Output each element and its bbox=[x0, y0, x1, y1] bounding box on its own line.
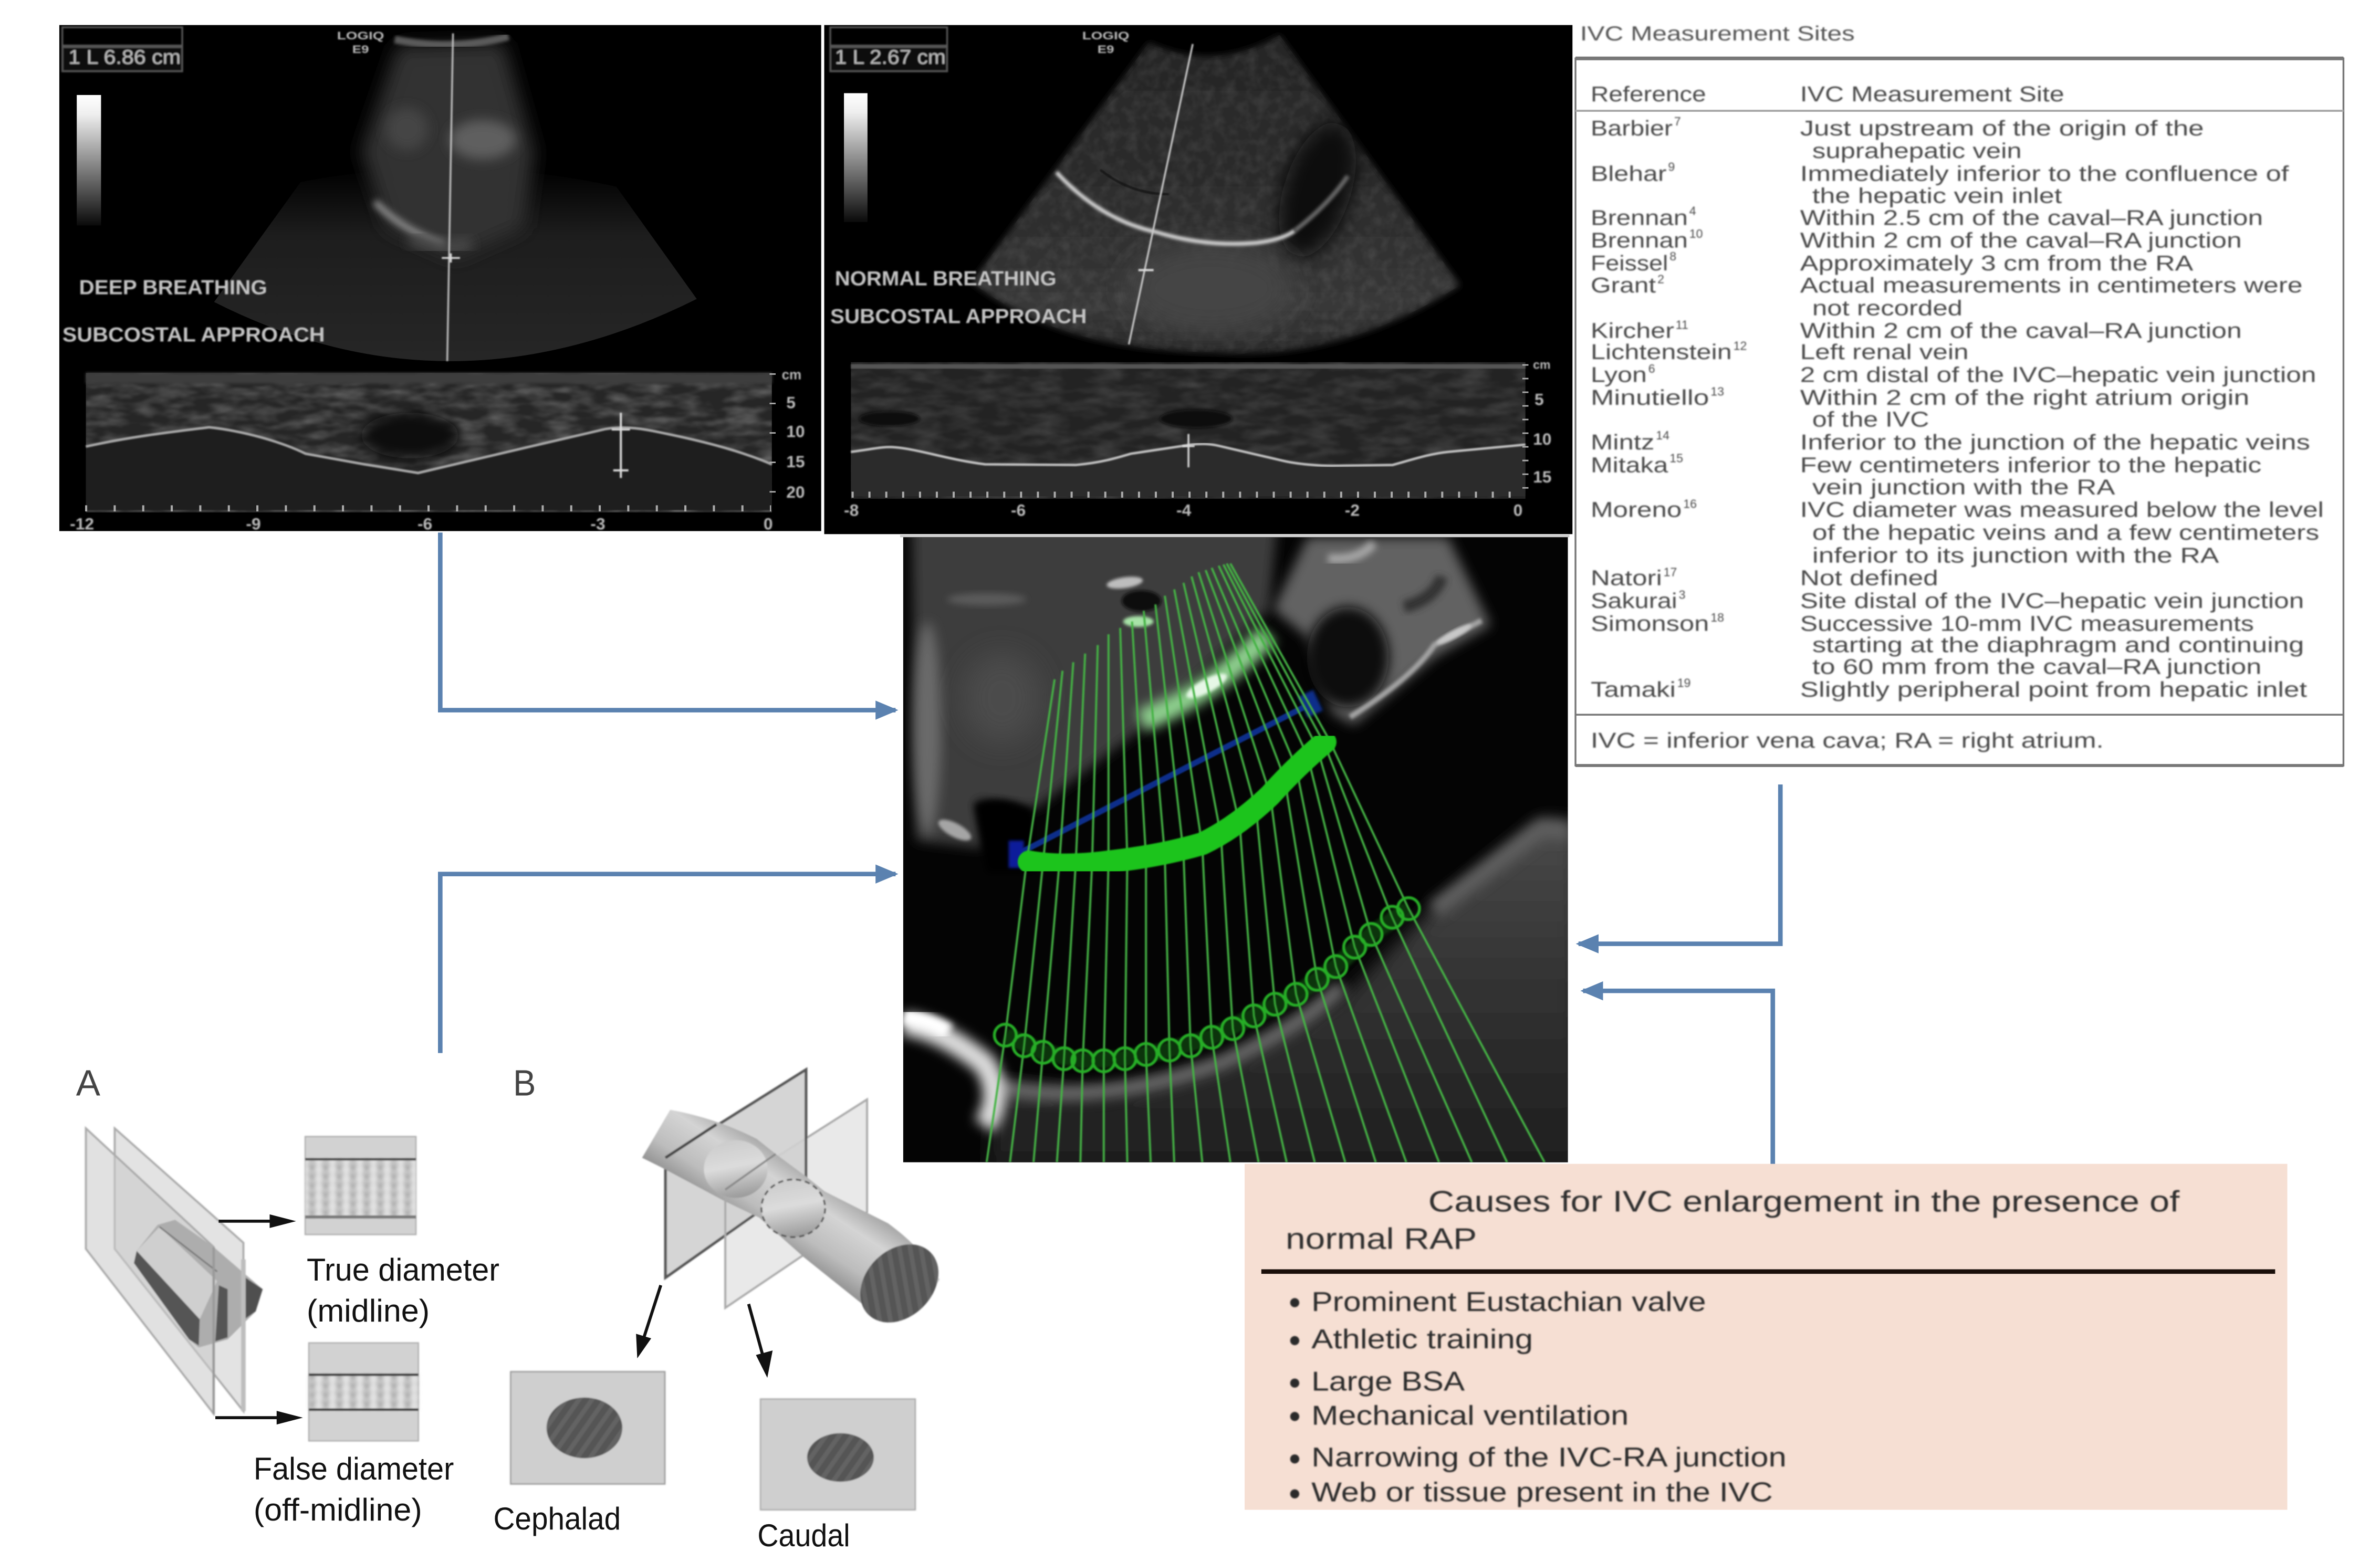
reference column: Mintz bbox=[1591, 430, 1654, 454]
blue diameter line bbox=[1009, 690, 1323, 868]
measurement site column: starting at the diaphragm and continuing bbox=[1812, 633, 2304, 657]
reference column: 14 bbox=[1656, 428, 1669, 442]
measurement site column: the hepatic vein inlet bbox=[1812, 183, 2062, 207]
causes list: Athletic training bbox=[1311, 1324, 1533, 1355]
ultrasound sector bbox=[214, 35, 696, 361]
reference column: Lyon bbox=[1591, 362, 1647, 386]
reference column: 4 bbox=[1689, 204, 1696, 218]
upper right tissue bbox=[1273, 537, 1490, 725]
breathing labels: NORMAL BREATHING bbox=[835, 267, 1057, 290]
measurement site column: 2 cm distal of the IVC–hepatic vein junction bbox=[1800, 362, 2316, 386]
reference column: 13 bbox=[1710, 384, 1724, 398]
diagram A labels: (off-midline) bbox=[254, 1492, 422, 1527]
measurement site column: Within 2 cm of the caval–RA junction bbox=[1800, 228, 2242, 253]
diagram B labels: Caudal bbox=[757, 1517, 850, 1553]
arrows to cross-sections bbox=[215, 1214, 303, 1424]
panel: central CT image with green measurement lines bbox=[900, 516, 1579, 1183]
reference column: Simonson bbox=[1591, 611, 1709, 635]
reference column: 6 bbox=[1648, 362, 1655, 375]
M-mode axis labels: 15 bbox=[786, 452, 805, 471]
causes heading: normal RAP bbox=[1286, 1222, 1477, 1255]
M-mode axis labels: 15 bbox=[1533, 467, 1552, 486]
measurement site column: Approximately 3 cm from the RA bbox=[1800, 251, 2193, 275]
measurement site column: Few centimeters inferior to the hepatic bbox=[1800, 453, 2261, 477]
M-mode axis labels: -12 bbox=[70, 515, 94, 533]
reference column: Barbier bbox=[1591, 116, 1673, 140]
M-mode axis labels: -8 bbox=[844, 501, 859, 520]
measurement site column: Slightly peripheral point from hepatic inlet bbox=[1800, 677, 2307, 701]
measurement site column: Just upstream of the origin of the bbox=[1800, 116, 2204, 140]
panel: deep breathing ultrasound bbox=[59, 25, 821, 533]
breathing labels: SUBCOSTAL APPROACH bbox=[830, 306, 1087, 328]
M-mode axis labels: 5 bbox=[1535, 390, 1544, 409]
reference column: 8 bbox=[1669, 249, 1676, 263]
measurement site column: Within 2.5 cm of the caval–RA junction bbox=[1800, 205, 2263, 229]
M-mode axis labels: -3 bbox=[590, 515, 606, 533]
reference column: Minutiello bbox=[1591, 385, 1709, 410]
causes list: Prominent Eustachian valve bbox=[1311, 1287, 1706, 1317]
measurement site column: Successive 10-mm IVC measurements bbox=[1800, 611, 2254, 635]
panel: diagram B cross-sectional planes bbox=[493, 1063, 954, 1553]
depth readout bbox=[62, 27, 384, 71]
tube with planes bbox=[642, 1070, 954, 1338]
causes list bbox=[1290, 1287, 1787, 1508]
causes heading: Causes for IVC enlargement in the presence of bbox=[1428, 1185, 2180, 1218]
M-mode axis labels: -4 bbox=[1176, 501, 1192, 520]
caudal section bbox=[760, 1399, 915, 1510]
ultrasound sector bbox=[972, 30, 1465, 364]
measurement site column: Not defined bbox=[1800, 566, 1938, 590]
M-mode axis labels bbox=[70, 367, 805, 533]
breathing labels: DEEP BREATHING bbox=[79, 277, 267, 299]
reference column: 19 bbox=[1677, 676, 1690, 689]
table header: Reference bbox=[1591, 82, 1706, 106]
reference column: Tamaki bbox=[1591, 677, 1676, 701]
table title: IVC Measurement Sites bbox=[1580, 23, 1855, 45]
reference column: 7 bbox=[1674, 114, 1681, 128]
reference column: Kircher bbox=[1591, 319, 1674, 343]
reference column bbox=[1591, 114, 1747, 701]
reference column: 18 bbox=[1710, 611, 1724, 624]
left upper tissue bbox=[912, 516, 1278, 848]
M-mode axis labels bbox=[844, 358, 1552, 520]
measurement site column: vein junction with the RA bbox=[1812, 475, 2115, 499]
grayscale bar bbox=[844, 93, 868, 222]
causes list: Web or tissue present in the IVC bbox=[1311, 1477, 1773, 1508]
M-mode strip bbox=[85, 373, 773, 513]
causes list: Narrowing of the IVC-RA junction bbox=[1311, 1442, 1787, 1473]
M-mode strip bbox=[851, 362, 1526, 499]
true diameter section bbox=[305, 1137, 416, 1234]
reference column: 17 bbox=[1664, 565, 1677, 579]
measurement site column: suprahepatic vein bbox=[1812, 139, 2022, 163]
measurement site column: Immediately inferior to the confluence of bbox=[1800, 161, 2289, 185]
measurement site column: Within 2 cm of the right atrium origin bbox=[1800, 385, 2249, 410]
measurement site column: Actual measurements in centimeters were bbox=[1800, 273, 2302, 297]
measurement line bbox=[1129, 44, 1193, 344]
reference column: Mitaka bbox=[1591, 453, 1668, 477]
depth readout: E9 bbox=[1098, 43, 1114, 56]
diagram A labels: (midline) bbox=[307, 1293, 430, 1328]
M-mode axis labels: 10 bbox=[786, 422, 805, 441]
arrows to sections bbox=[636, 1285, 773, 1378]
M-mode axis labels: -6 bbox=[417, 515, 432, 533]
diagram A labels: False diameter bbox=[254, 1451, 454, 1486]
reference column: Brennan bbox=[1591, 228, 1688, 253]
panel: normal breathing ultrasound bbox=[824, 25, 1572, 534]
reference column: 3 bbox=[1679, 588, 1685, 602]
panel letter A: A bbox=[76, 1063, 101, 1104]
measurement site column: Site distal of the IVC–hepatic vein junction bbox=[1800, 589, 2304, 613]
measurement site column: not recorded bbox=[1812, 296, 1963, 320]
table frame bbox=[1575, 58, 2343, 766]
arrow: deep breathing to CT bbox=[440, 532, 895, 710]
measurement site column: Within 2 cm of the caval–RA junction bbox=[1800, 319, 2242, 343]
reference column: 12 bbox=[1734, 339, 1747, 353]
M-mode axis labels: 20 bbox=[786, 483, 805, 501]
diagram A labels bbox=[254, 1252, 499, 1527]
panel letter B: B bbox=[513, 1063, 536, 1104]
M-mode axis labels: 5 bbox=[786, 393, 796, 412]
measurement line bbox=[442, 34, 460, 361]
arrow: diagrams to CT bbox=[440, 874, 895, 1053]
M-mode axis labels: cm bbox=[782, 367, 801, 383]
M-mode axis labels: 0 bbox=[764, 515, 773, 533]
green lower wall markers bbox=[994, 898, 1419, 1072]
measurement site column: of the IVC bbox=[1812, 407, 1929, 432]
reference column: Sakurai bbox=[1591, 589, 1677, 613]
depth readout: LOGIQ bbox=[1082, 29, 1129, 42]
reference column: 16 bbox=[1683, 497, 1697, 510]
panel: diagram A longitudinal planes bbox=[76, 1063, 499, 1527]
reference column: 9 bbox=[1668, 160, 1675, 174]
M-mode axis labels: -9 bbox=[246, 515, 261, 533]
arrow: table to CT bbox=[1579, 784, 1780, 944]
reference column: Natori bbox=[1591, 566, 1662, 590]
M-mode axis labels: cm bbox=[1533, 358, 1551, 371]
M-mode axis labels: -6 bbox=[1011, 501, 1026, 520]
panel: causes for IVC enlargement bbox=[1245, 1164, 2287, 1510]
reference column: 11 bbox=[1676, 318, 1688, 331]
depth readout: 1 L 2.67 cm bbox=[835, 46, 946, 68]
lower tissue band bbox=[987, 821, 1579, 1183]
panel: IVC measurement sites table bbox=[1575, 23, 2343, 766]
table header bbox=[1591, 82, 2064, 106]
scan planes and vessel bbox=[86, 1128, 263, 1414]
reference column: Blehar bbox=[1591, 161, 1666, 185]
table header: IVC Measurement Site bbox=[1800, 82, 2064, 106]
green upper wall markers bbox=[1029, 742, 1325, 865]
reference column: 15 bbox=[1669, 452, 1683, 465]
measurement site column: Left renal vein bbox=[1800, 340, 1969, 364]
grayscale bar bbox=[77, 95, 101, 225]
depth readout: 1 L 6.86 cm bbox=[68, 46, 181, 68]
M-mode axis labels: 10 bbox=[1533, 429, 1552, 448]
diagram B labels bbox=[493, 1501, 850, 1553]
table footnote: IVC = inferior vena cava; RA = right atrium. bbox=[1591, 728, 2104, 752]
breathing labels bbox=[62, 277, 325, 346]
reference column: 10 bbox=[1689, 227, 1703, 240]
diagram A labels: True diameter bbox=[307, 1252, 499, 1287]
green fan lines bbox=[987, 563, 1544, 1162]
reference column: 2 bbox=[1657, 272, 1664, 286]
false diameter section bbox=[309, 1343, 419, 1441]
measurement site column: to 60 mm from the caval–RA junction bbox=[1812, 655, 2261, 679]
reference column: Feissel bbox=[1591, 251, 1668, 275]
reference column: Grant bbox=[1591, 273, 1656, 297]
measurement site column: IVC diameter was measured below the level bbox=[1800, 498, 2324, 522]
diagram B labels: Cephalad bbox=[493, 1501, 621, 1536]
measurement site column: Inferior to the junction of the hepatic veins bbox=[1800, 430, 2310, 454]
measurement site column bbox=[1800, 116, 2324, 701]
depth readout: LOGIQ bbox=[337, 29, 384, 42]
depth readout: E9 bbox=[352, 43, 369, 56]
M-mode axis labels: 0 bbox=[1513, 501, 1522, 520]
causes list: Large BSA bbox=[1311, 1367, 1465, 1397]
arrow: causes box to CT bbox=[1583, 991, 1773, 1166]
causes heading bbox=[1286, 1185, 2180, 1255]
breathing labels bbox=[830, 267, 1087, 328]
reference column: Lichtenstein bbox=[1591, 340, 1732, 364]
measurement site column: of the hepatic veins and a few centimeters bbox=[1812, 520, 2319, 544]
causes list: Mechanical ventilation bbox=[1311, 1401, 1629, 1431]
depth readout bbox=[830, 27, 1129, 71]
bright wall band bbox=[1142, 634, 1267, 721]
reference column: Brennan bbox=[1591, 205, 1688, 229]
reference column: Moreno bbox=[1591, 498, 1682, 522]
breathing labels: SUBCOSTAL APPROACH bbox=[62, 323, 325, 346]
measurement site column: inferior to its junction with the RA bbox=[1812, 543, 2219, 567]
cephalad section bbox=[510, 1372, 665, 1484]
M-mode axis labels: -2 bbox=[1345, 501, 1360, 520]
